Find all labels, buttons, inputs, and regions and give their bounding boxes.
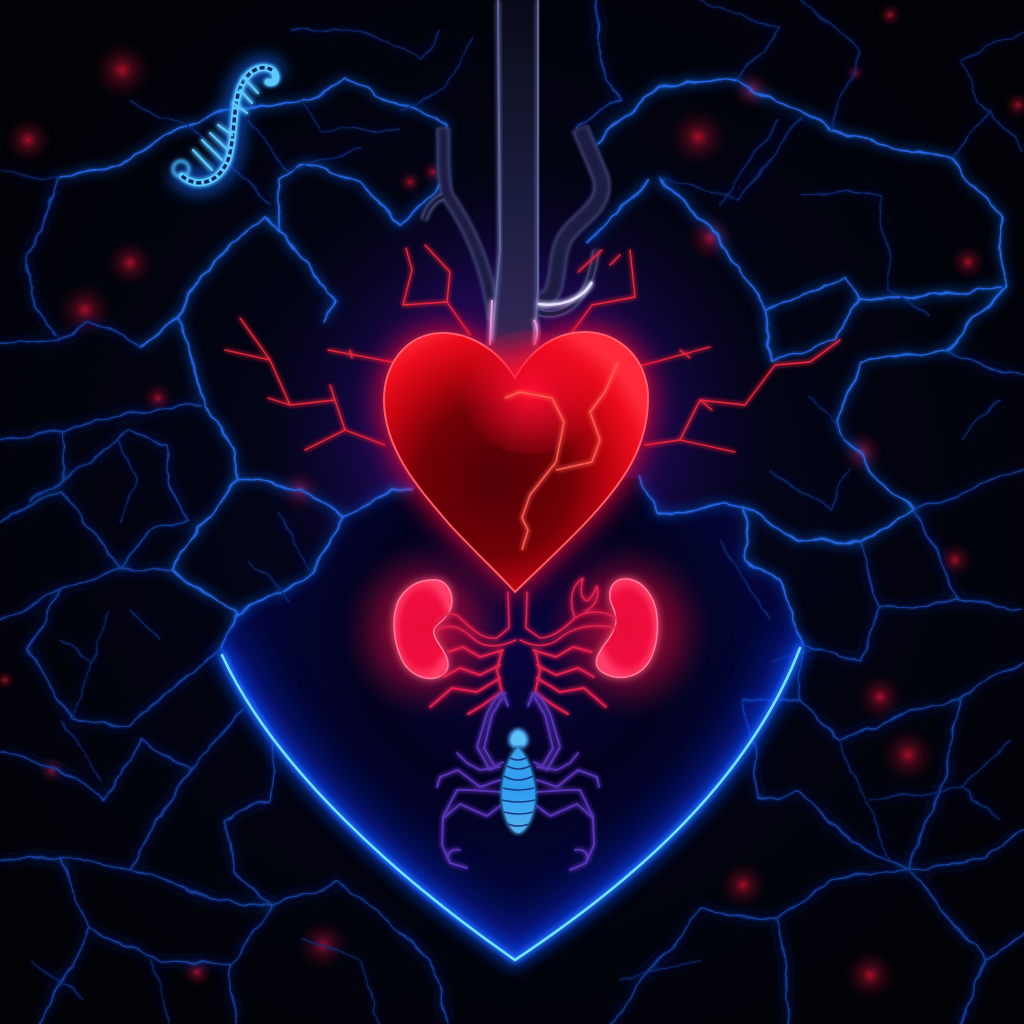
inner shield haze bbox=[222, 648, 800, 960]
right vessel branch bbox=[538, 128, 602, 314]
heart cracks bbox=[505, 362, 618, 550]
glowing blue shield outline bbox=[222, 648, 800, 960]
heart outer glow bbox=[384, 332, 648, 592]
heart bbox=[384, 330, 648, 592]
red scorpion upper section bbox=[430, 578, 618, 714]
blue scorpion lower section bbox=[437, 693, 599, 870]
heart ambient glow bbox=[240, 160, 800, 700]
scorpion head bbox=[510, 730, 527, 746]
kidney halos bbox=[340, 538, 713, 722]
scorpion body bbox=[502, 748, 535, 833]
right kidney bbox=[596, 579, 658, 677]
heart body bbox=[384, 332, 648, 592]
trunk edge lines bbox=[490, 0, 592, 345]
DNA backbone outline bbox=[182, 68, 276, 183]
right pink legs bbox=[533, 647, 606, 714]
central trunk bbox=[490, 0, 538, 390]
scorpion legs bbox=[437, 693, 599, 870]
left kidney bbox=[394, 580, 452, 678]
DNA backbone bbox=[173, 68, 276, 183]
DNA helix icon bbox=[173, 68, 276, 183]
heart highlight bbox=[460, 330, 600, 454]
DNA ladder lines bbox=[193, 77, 258, 170]
DNA glow bbox=[182, 68, 272, 183]
red vessel cracks around heart bbox=[225, 245, 840, 452]
neck and arms bbox=[435, 578, 618, 646]
claw on right arm bbox=[572, 578, 598, 618]
blood vessels above heart bbox=[424, 0, 602, 390]
body stripes bbox=[502, 758, 535, 826]
left pink legs bbox=[430, 647, 503, 714]
left vessel branch bbox=[424, 128, 494, 320]
DNA inner rungs bbox=[182, 68, 272, 183]
shield fill below the heart bbox=[220, 478, 802, 960]
